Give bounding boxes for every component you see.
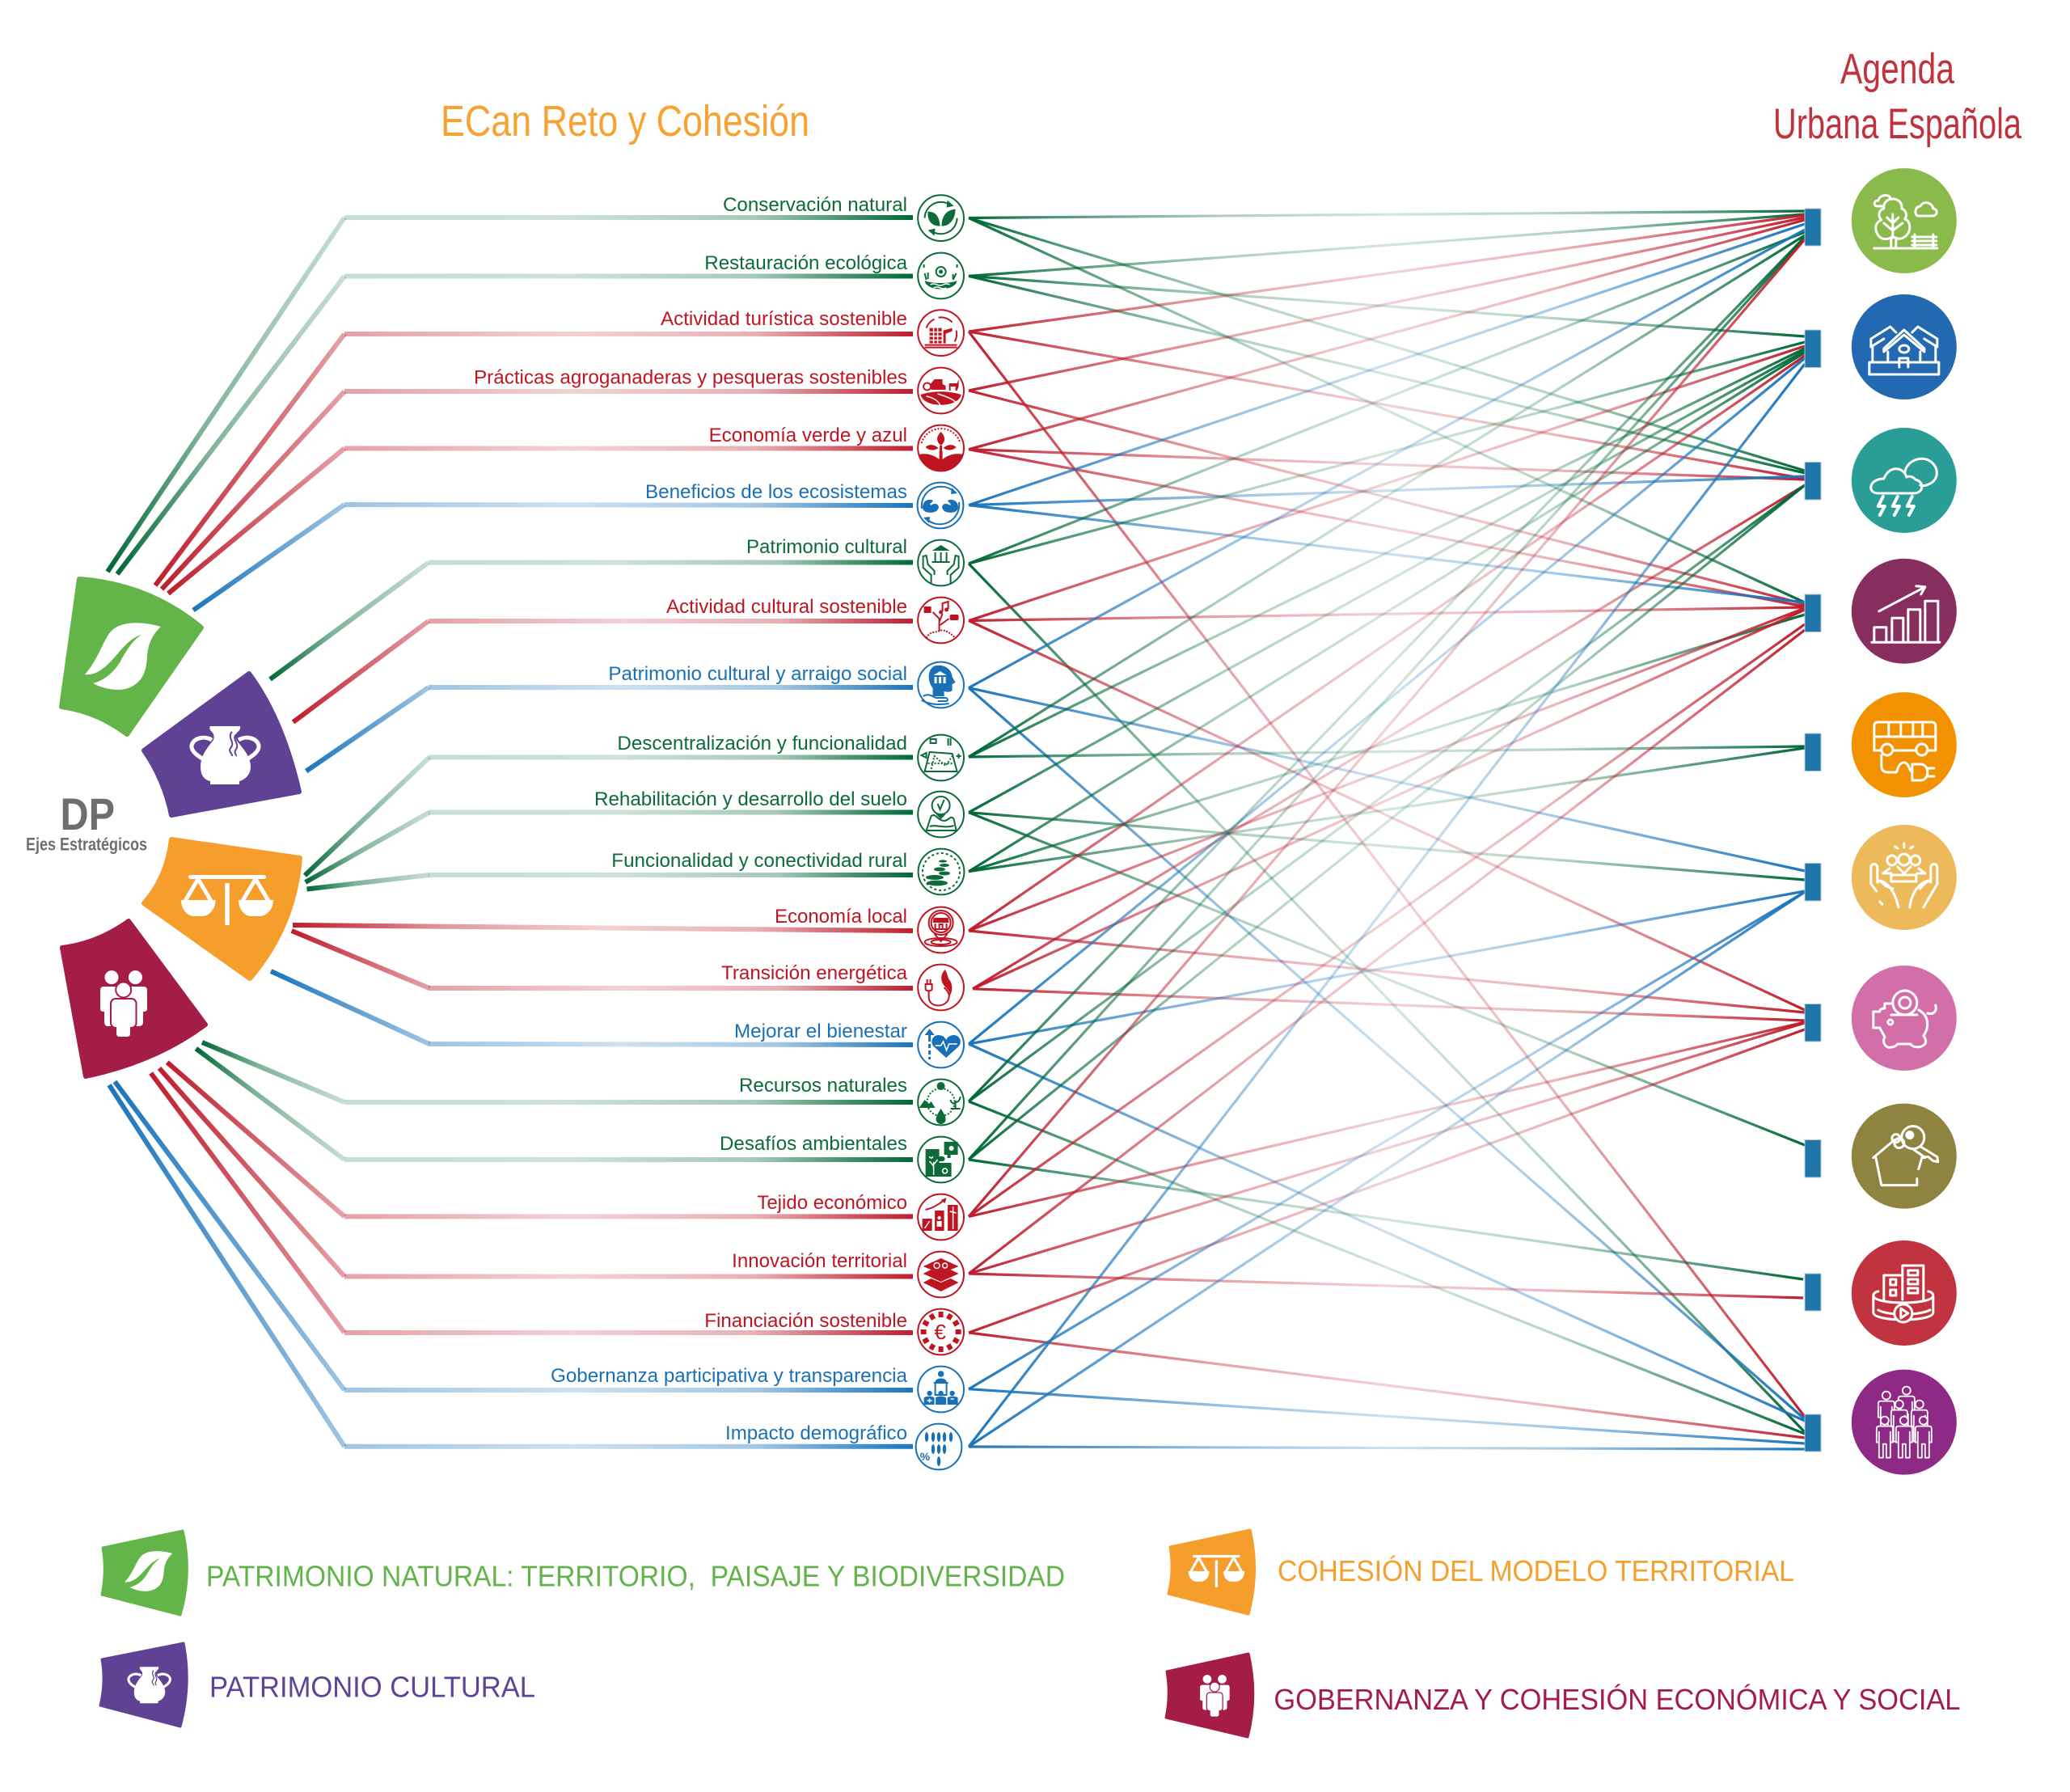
row: Patrimonio cultural y arraigo social	[608, 662, 964, 708]
row: Beneficios de los ecosistemas: Beneficios de los ecosistemas	[645, 481, 907, 503]
connector: Patrimonio cultural y arraigo social	[306, 687, 913, 771]
icon: electric bus	[1852, 692, 1957, 797]
icon: heart with arrow	[918, 1022, 964, 1067]
icon: strong arms	[918, 483, 963, 528]
icon: growth bars	[918, 1194, 964, 1240]
legend: patrimonio cultural	[100, 1643, 535, 1726]
icon: city with play	[1852, 1240, 1957, 1346]
row: Transición energética	[721, 962, 964, 1010]
icon: map with services	[918, 735, 964, 780]
row: Recursos naturales	[739, 1075, 964, 1125]
row: Mejorar el bienestar	[734, 1021, 964, 1067]
icon: puzzle	[918, 1137, 964, 1182]
connector: Actividad turística sostenible	[155, 334, 913, 585]
row: Economía local	[775, 906, 964, 953]
row: Funcionalidad y conectividad rural	[611, 849, 964, 894]
row: Actividad cultural sostenible: Actividad cultural sostenible	[666, 596, 907, 618]
connector: Actividad cultural sostenible	[293, 621, 913, 722]
legend badge: jar	[100, 1643, 187, 1726]
row: Prácticas agroganaderas y pesqueras sostenibles: Prácticas agroganaderas y pesqueras sostenibles	[474, 367, 907, 388]
wedge: gobernanza y cohesión	[62, 921, 205, 1076]
label: DP Ejes Estratégicos: DP	[60, 788, 115, 839]
panel: strategic axes wedges	[61, 579, 300, 1076]
row: Actividad turística sostenible	[661, 308, 964, 356]
connector: Prácticas agroganaderas	[162, 391, 913, 590]
connector: Gobernanza participativa y transparencia	[115, 1082, 913, 1390]
icon: land with check pin	[918, 792, 964, 837]
connector: Mejorar el bienestar	[271, 971, 913, 1045]
row: Innovación territorial: Innovación territorial	[732, 1250, 907, 1272]
icon: population pyramid	[916, 1424, 961, 1469]
legend badge: scale	[1168, 1530, 1255, 1614]
icon: natural cycle	[918, 1080, 964, 1125]
row: Rehabilitación y desarrollo del suelo: Rehabilitación y desarrollo del suelo	[594, 788, 907, 810]
icon: temple in hands	[918, 540, 964, 585]
icon: euro ring: €	[934, 1320, 946, 1344]
row: Financiación sostenible: Financiación sostenible	[704, 1310, 907, 1332]
row: Conservación natural: Conservación natural	[723, 194, 907, 216]
icon: leaves in cycle	[918, 195, 964, 241]
icon: connected path	[919, 849, 964, 894]
row: Actividad cultural sostenible	[666, 596, 964, 643]
legend: gobernanza y cohesión	[1166, 1654, 1960, 1737]
row: Economía verde y azul	[709, 425, 964, 471]
legend: gobernanza y cohesión: GOBERNANZA Y COHESIÓN ECONÓMICA Y SOCIAL	[1274, 1683, 1960, 1716]
wedge: patrimonio natural	[61, 579, 201, 734]
title: Agenda Urbana Española	[1773, 45, 2021, 148]
connector lines: wedges to challenge rows	[108, 218, 913, 1447]
title: ECan Reto y Cohesión: ECan Reto y Cohesión	[441, 97, 809, 146]
connector: Financiación sostenible	[151, 1073, 913, 1333]
icon: population	[1852, 1370, 1957, 1475]
row: Rehabilitación y desarrollo del suelo	[594, 788, 964, 837]
icon: growth chart	[1852, 559, 1957, 664]
connector: Desafíos ambientales	[196, 1049, 913, 1160]
row: Funcionalidad y conectividad rural: Funcionalidad y conectividad rural	[611, 850, 907, 872]
icon: population pyramid: %	[920, 1450, 931, 1463]
wedge: patrimonio cultural	[144, 674, 299, 815]
row: Patrimonio cultural: Patrimonio cultural	[746, 536, 907, 558]
icon: head with temple	[918, 662, 964, 708]
legend badge: leaf	[102, 1531, 187, 1615]
icon: shop pin	[918, 907, 964, 953]
icon: plug and flame	[918, 965, 964, 1010]
row: Impacto demográfico	[725, 1422, 961, 1469]
connector: Funcionalidad y conectividad rural	[307, 875, 913, 890]
connector: Conservación natural	[108, 218, 913, 572]
connector: Tejido económico	[167, 1063, 913, 1216]
legend: patrimonio natural: PATRIMONIO NATURAL: TERRITORIO, PAISAJE Y BIODIVERSIDAD	[206, 1560, 1065, 1593]
row: Restauración ecológica: Restauración ecológica	[704, 252, 908, 274]
row: Economía verde y azul: Economía verde y azul	[709, 425, 907, 446]
row: Restauración ecológica	[704, 252, 964, 298]
row: Innovación territorial	[732, 1250, 964, 1297]
connector: Patrimonio cultural	[270, 563, 913, 679]
icon: territory and nature	[1852, 168, 1957, 273]
panel: Agenda Urbana objective icons	[1852, 168, 1957, 1475]
icon: tractor and fields	[918, 368, 964, 413]
legend: cohesión del modelo territorial: COHESIÓN DEL MODELO TERRITORIAL	[1278, 1554, 1794, 1587]
row: Mejorar el bienestar: Mejorar el bienestar	[734, 1021, 907, 1042]
icon: layered land	[918, 1252, 964, 1297]
row: Gobernanza participativa y transparencia	[551, 1365, 964, 1412]
connector: Rehabilitación y desarrollo del suelo	[306, 812, 913, 882]
row: Conservación natural	[723, 194, 964, 241]
row: Desafíos ambientales	[720, 1133, 964, 1182]
icon: euro ring	[918, 1309, 964, 1355]
connector: Descentralización y funcionalidad	[305, 757, 913, 876]
connection network: challenges to Agenda Urbana objectives	[969, 211, 1805, 1449]
legend: cohesión del modelo territorial	[1168, 1530, 1794, 1614]
panel: legend	[100, 1530, 1960, 1737]
row: Impacto demográfico: Impacto demográfico	[725, 1422, 907, 1444]
row: Descentralización y funcionalidad: Descentralización y funcionalidad	[617, 733, 907, 754]
row: Financiación sostenible	[704, 1309, 964, 1355]
row: Transición energética: Transición energética	[721, 962, 908, 984]
legend: patrimonio natural	[102, 1531, 1065, 1615]
row: Tejido económico	[757, 1192, 964, 1240]
icon: people in hands	[1852, 825, 1957, 930]
row: Desafíos ambientales: Desafíos ambientales	[720, 1133, 907, 1155]
icon: houses	[1852, 294, 1957, 399]
connection target bars	[1805, 209, 1821, 1452]
icon: house and keys	[1852, 1104, 1957, 1209]
icon: piggy bank	[1852, 966, 1957, 1071]
legend badge: people	[1166, 1654, 1253, 1737]
connector: Beneficios de los ecosistemas	[193, 505, 913, 611]
connector: Transición energética	[292, 931, 913, 988]
row: Recursos naturales: Recursos naturales	[739, 1075, 907, 1097]
row: Economía local: Economía local	[775, 906, 907, 928]
row: Actividad turística sostenible: Actividad turística sostenible	[661, 308, 907, 330]
row: Patrimonio cultural	[746, 536, 964, 585]
icon: tourism buildings	[918, 310, 964, 356]
icon: climate	[1852, 428, 1957, 533]
wedge: cohesión del modelo territorial	[144, 839, 300, 978]
row: Descentralización y funcionalidad	[617, 733, 964, 780]
connector: Impacto demográfico	[109, 1085, 913, 1447]
label: DP Ejes Estratégicos: Ejes Estratégicos	[26, 835, 147, 854]
connector: Economía local	[293, 925, 913, 931]
row: Patrimonio cultural y arraigo social: Patrimonio cultural y arraigo social	[608, 663, 907, 685]
icon: speaker and audience	[918, 1367, 964, 1412]
legend: patrimonio cultural: PATRIMONIO CULTURAL	[209, 1671, 535, 1704]
icon: plant on earth	[918, 425, 964, 471]
connector: Recursos naturales	[202, 1042, 913, 1102]
row: Beneficios de los ecosistemas	[645, 481, 963, 528]
icon: wetland	[918, 253, 964, 298]
row: Gobernanza participativa y transparencia: Gobernanza participativa y transparencia	[551, 1365, 908, 1387]
title: Agenda Urbana Española: Agenda	[1840, 45, 1954, 93]
label: DP Ejes Estratégicos	[26, 788, 147, 854]
icon: culture tree	[918, 598, 964, 643]
connector: Restauración ecológica	[117, 277, 913, 574]
connector: Economía verde y azul	[168, 448, 913, 594]
row: Prácticas agroganaderas y pesqueras sostenibles	[474, 367, 964, 413]
connector: Innovación territorial	[159, 1068, 913, 1276]
row: Tejido económico: Tejido económico	[757, 1192, 907, 1214]
